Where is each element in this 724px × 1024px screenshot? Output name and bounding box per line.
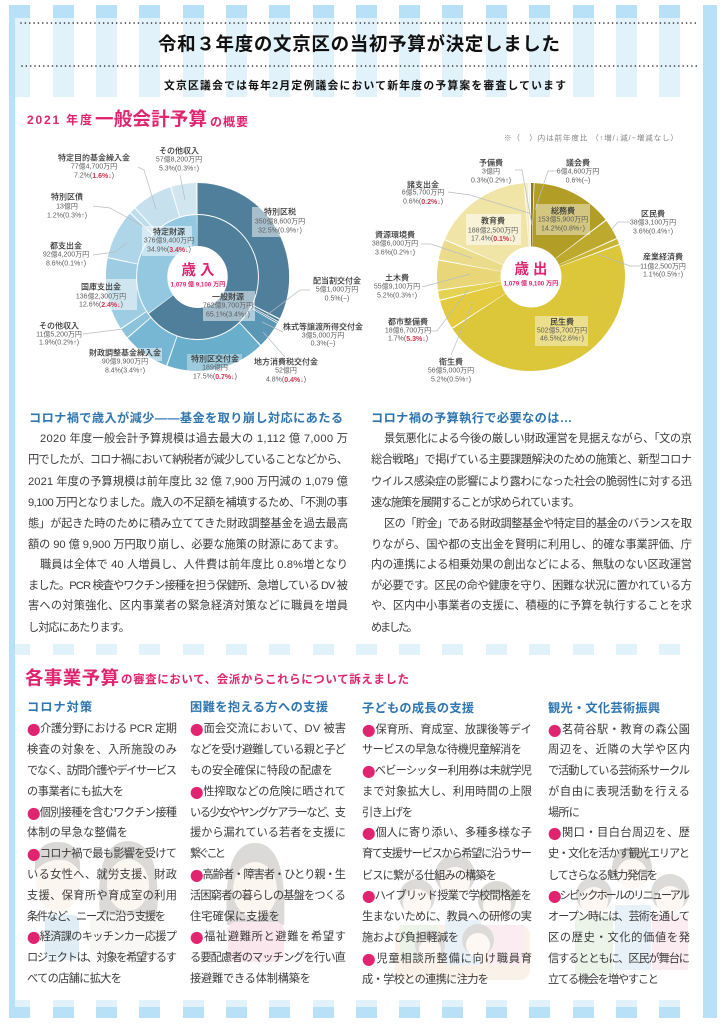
column: covid measures: いる女性へ、就労支援、財政 — [27, 867, 177, 881]
revenue labels: 配当割交付金 — [313, 276, 361, 286]
revenue labels: 都支出金 — [50, 240, 82, 250]
chart: revenue donut — [36, 146, 363, 384]
expenditure labels: 14.2%(0.8%↑) — [541, 226, 585, 232]
column heading: 子どもの成長の支援 — [362, 700, 474, 715]
column: support for people in difficulty: 援から漏れている若者を支援に — [190, 825, 346, 839]
column: tourism and culture: オープン時には、芸術を通して — [548, 909, 690, 923]
expenditure labels: 1.7%(5.3%↓) — [388, 336, 428, 342]
column: covid measures: 体制の早急な整備を — [27, 825, 128, 839]
column heading: 困難を抱える方への支援 — [190, 699, 328, 714]
expenditure labels: 区民費 — [641, 208, 665, 218]
revenue labels: 4.8%(0.4%↓) — [266, 376, 306, 384]
article body: budget execution — [371, 431, 692, 634]
column: tourism and culture: 場所に — [548, 805, 580, 819]
section heading: general account budget: の概要 — [210, 115, 248, 129]
revenue labels: 136億2,300万円 — [76, 292, 126, 300]
revenue labels: 52億円 — [275, 366, 297, 374]
donut rings — [121, 198, 274, 356]
revenue labels: 株式等譲渡所得交付金 — [283, 322, 363, 332]
column: support for people in difficulty: などを受け避難している親と子ど — [190, 742, 346, 756]
centre: revenue total: 歳 入 — [181, 262, 215, 279]
expenditure labels: 56億5,000万円 — [428, 366, 474, 374]
column: tourism and culture: で活動している芸術系サークル — [548, 763, 690, 777]
revenue labels: 350億8,600万円 — [255, 216, 305, 226]
column: covid measures — [27, 699, 177, 985]
expenditure labels: 議会費 — [566, 158, 590, 168]
illustration: girl watermark — [226, 843, 284, 962]
revenue labels: 90億9,900万円 — [102, 356, 148, 366]
revenue labels: 1.9%(0.2%↑) — [39, 340, 79, 346]
expenditure labels: 教育費 — [481, 216, 505, 226]
column: support for people in difficulty: 接避難できる体制構築を — [190, 971, 311, 985]
column: child development: 生まないために、教員への研修の実 — [362, 909, 532, 923]
column: support for people in difficulty: 住宅確保に支援を — [190, 909, 280, 923]
revenue labels: 0.5%(−) — [325, 296, 349, 302]
column: support for people in difficulty: もの安全確保に特段の配慮を — [190, 763, 333, 777]
section heading: committee reviews: の審査において、会派からこれらについて訴えました — [121, 672, 409, 686]
revenue labels: その他収入 — [39, 320, 79, 330]
column: child development: ●保育所、育成室、放課後等デイ — [362, 720, 532, 740]
revenue labels: 1.2%(0.3%↑) — [47, 212, 87, 220]
revenue labels: 一般財源 — [212, 292, 244, 302]
article body: revenue decline: 2020 年度一般会計予算規模は過去最大の 1,112 億 7,000 万 — [40, 431, 348, 445]
expenditure labels: 衛生費 — [439, 356, 463, 366]
label boxes — [466, 204, 590, 346]
article body: revenue decline: ました。PCR 検査やワクチン接種を担う保健所、急増している DV 被 — [28, 578, 348, 592]
expenditure labels: 6億5,700万円 — [402, 188, 444, 196]
column: tourism and culture: 信するとともに、区民が舞台に — [548, 951, 690, 965]
revenue labels: 65.1%(3.4%↑) — [206, 312, 250, 318]
column: covid measures: でなく、訪問介護やデイサービス — [27, 763, 177, 777]
column: child development: ●個人に寄り添い、多種多様な子 — [362, 823, 532, 843]
revenue labels: 8.4%(3.4%↑) — [105, 368, 145, 374]
article body: revenue decline: 態」が起きた時のために積み立ててきた財政調整基金を過去最高 — [28, 516, 348, 530]
centre: expenditure total — [504, 261, 558, 288]
expenditure labels: 民生費 — [550, 316, 574, 326]
column: child development: 育て支援サービスから希望に沿うサー — [362, 846, 532, 860]
expenditure labels: 3.6%(0.2%↑) — [375, 250, 415, 256]
article heading: revenue decline: コロナ禍で歳入が減少――基金を取り崩し対応にあたる — [29, 410, 343, 425]
centre: revenue total — [171, 262, 225, 288]
expenditure labels — [372, 158, 686, 384]
article body: revenue decline — [28, 431, 348, 634]
illustration: singing group watermark — [575, 847, 689, 975]
column: child development: まで対象拡大し、利用時間の上限 — [362, 784, 532, 798]
article body: budget execution: りながら、国や都の支出金を賢明に利用し、的確な事業評価、庁 — [371, 537, 692, 551]
column: child development: ●ハイブリッド授業で学校間格差を — [362, 886, 532, 906]
article body: budget execution: ウイルス感染症の影響により露わになった社会の脆弱性に対する迅 — [371, 474, 692, 488]
column: child development: サービスの早急な待機児童解消を — [362, 742, 522, 756]
revenue labels: 地方消費税交付金 — [254, 356, 318, 366]
illustration: couple watermark — [35, 841, 160, 960]
revenue labels — [36, 146, 363, 384]
column: tourism and culture: 立てる機会を増やすこと — [548, 972, 659, 986]
column: support for people in difficulty: いる少女やヤングケアラーなど、支 — [190, 805, 346, 819]
article body: budget execution: 区の「貯金」である財政調整基金や特定目的基金のバランスを取 — [384, 516, 692, 530]
expenditure labels: 17.4%(0.1%↓) — [471, 236, 515, 242]
column: tourism and culture: ●シビックホールのリニューアル — [548, 886, 690, 906]
revenue labels: 11億5,200万円 — [36, 330, 82, 338]
column: covid measures: 条件など、ニーズに沿う支援を — [27, 909, 166, 923]
centre: expenditure total: 1,079 億 9,100 万円 — [504, 280, 558, 288]
revenue labels: 特定財源 — [153, 226, 185, 236]
revenue labels: 762億9,700万円 — [203, 300, 253, 310]
chart: expenditure donut — [372, 158, 686, 384]
section heading: committee reviews — [25, 668, 409, 688]
revenue labels: 12.6%(2.4%↓) — [79, 302, 123, 308]
column: child development: 引き上げを — [362, 805, 413, 819]
article body: budget execution: 内の連携による相乗効果の創出などによる、無駄のない区政運営 — [371, 557, 692, 571]
revenue labels: 財政調整基金繰入金 — [89, 348, 161, 358]
article body: budget execution: が必要です。区民の命や健康を守り、困難な状況に置かれている方 — [371, 578, 692, 592]
expenditure labels: 5.2%(0.5%↑) — [431, 376, 471, 384]
article body: budget execution: や、区内中小事業者の支援に、積極的に予算を執行することを求 — [371, 598, 692, 612]
column: tourism and culture — [548, 700, 690, 986]
expenditure labels: 0.3%(0.2%↑) — [471, 178, 511, 184]
revenue labels: 376億9,400万円 — [144, 236, 194, 244]
revenue labels: 特別区交付金 — [191, 354, 239, 364]
article body: revenue decline: 額の 90 億 9,900 万円取り崩し、必要な施策の財源にあてます。 — [28, 537, 345, 551]
revenue labels: 17.5%(0.7%↓) — [193, 374, 237, 380]
expenditure labels: 188億2,500万円 — [468, 226, 518, 234]
column: support for people in difficulty: ●高齢者・障害者・ひとり親・生 — [190, 865, 346, 885]
expenditure labels: 18億6,700万円 — [385, 326, 431, 334]
column: support for people in difficulty: 繋ぐこと — [190, 846, 226, 860]
article body: budget execution: めました。 — [371, 621, 418, 634]
column: support for people in difficulty — [190, 699, 346, 985]
column: covid measures: ●経済課のキッチンカー応援プ — [27, 927, 177, 947]
column: covid measures: 検査の対象を、入所施設のみ — [27, 742, 177, 756]
revenue labels: 34.9%(3.4%↓) — [147, 246, 191, 254]
article body: revenue decline: し対応にあたります。 — [28, 621, 130, 634]
expenditure labels: 3.6%(0.4%↑) — [633, 228, 673, 236]
section heading: general account budget: 2021 年度 — [27, 112, 92, 127]
column: support for people in difficulty: る要配慮者のマッチングを行い直 — [190, 950, 346, 964]
section heading: committee reviews: 各事業予算 — [25, 668, 119, 688]
expenditure labels: 資源環境費 — [375, 230, 415, 240]
expenditure labels: 55億9,100万円 — [374, 282, 420, 290]
expenditure labels: 502億5,700万円 — [537, 326, 587, 334]
column: child development: 施および負担軽減を — [362, 930, 459, 944]
revenue labels: 57億8,200万円 — [156, 154, 202, 164]
column: support for people in difficulty: 活困窮者の暮らしの基盤をつくる — [190, 888, 346, 902]
leader lines — [83, 167, 310, 357]
revenue labels: 189億円 — [202, 362, 228, 372]
expenditure labels: 38億3,100万円 — [630, 218, 676, 226]
revenue labels: 特別区税 — [264, 206, 296, 216]
column: covid measures: 支援、保育所や育成室の利用 — [27, 888, 177, 902]
revenue labels: 32.5%(0.9%↑) — [258, 228, 302, 234]
column: child development — [362, 700, 532, 986]
revenue labels: 5.3%(0.3%↑) — [159, 166, 199, 172]
expenditure labels: 153億5,900万円 — [538, 214, 588, 224]
column: tourism and culture: してさらなる魅力発信を — [548, 868, 658, 882]
article body: revenue decline: 9,100 万円となりました。歳入の不足額を補填するため、「不測の事 — [28, 495, 348, 509]
revenue labels: 92億4,200万円 — [43, 250, 89, 258]
expenditure labels: 0.6%(−) — [566, 178, 590, 184]
column: support for people in difficulty: ●性搾取などの危険に晒されて — [190, 782, 346, 802]
column: child development: ビスに繋がる仕組みの構築を — [362, 868, 497, 882]
revenue labels: 3億5,000万円 — [302, 330, 344, 340]
column: child development: 成・学校との連携に注力を — [362, 972, 489, 986]
article heading: budget execution: コロナ禍の予算執行で必要なのは… — [371, 410, 572, 425]
column: covid measures: の事業者にも拡大を — [27, 784, 124, 798]
column: covid measures: べての店舗に拡大を — [27, 971, 122, 985]
expenditure labels: 総務費 — [551, 206, 575, 216]
expenditure labels: 38億6,000万円 — [372, 238, 418, 248]
revenue labels: 5億1,000万円 — [316, 284, 358, 294]
section heading: general account budget: 一般会計予算 — [95, 108, 207, 130]
article body: budget execution: 総合戦略」で掲げている主要課題解決のための施策と、新型コロナ — [371, 452, 692, 466]
section heading: general account budget — [27, 108, 248, 130]
expenditure labels: 諸支出金 — [407, 180, 439, 190]
revenue labels: 0.3%(−) — [311, 340, 335, 348]
centre: revenue total: 1,079 億 9,100 万円 — [171, 280, 225, 288]
column: covid measures: ●コロナ禍で最も影響を受けて — [27, 844, 177, 864]
expenditure labels: 都市整備費 — [388, 316, 428, 326]
column: covid measures: ●個別接種を含むワクチン接種 — [27, 803, 177, 823]
column: covid measures: ロジェクトは、対象を希望するす — [27, 950, 177, 964]
expenditure labels: 5.2%(0.3%↑) — [377, 292, 417, 300]
expenditure labels: 0.6%(0.2%↓) — [403, 198, 443, 206]
expenditure labels: 6億4,600万円 — [557, 166, 599, 176]
revenue labels: その他収入 — [159, 146, 199, 156]
column: tourism and culture: 区の歴史・文化的価値を発 — [548, 930, 690, 944]
column: child development: ●児童相談所整備に向け職員育 — [362, 949, 532, 969]
column: support for people in difficulty: ●面会交流において、DV 被害 — [190, 719, 346, 739]
title: 令和３年度の文京区の当初予算が決定しました — [158, 34, 560, 54]
label boxes — [88, 207, 303, 382]
article body: revenue decline: 害への対策強化、区内事業者の緊急経済対策などに職員を増員 — [28, 598, 348, 612]
expenditure labels: 産業経済費 — [643, 252, 683, 262]
illustration: children group watermark — [395, 855, 530, 980]
article body: budget execution: 速な施策を展開することが求められています。 — [371, 495, 580, 509]
column: tourism and culture: ●茗荷谷駅・教育の森公園 — [548, 720, 690, 740]
article body: revenue decline: 2021 年度の予算規模は前年度比 32 億 7,900 万円減の 1,079 億 — [28, 474, 348, 488]
column heading: 観光・文化芸術振興 — [548, 700, 660, 715]
revenue labels: 特定目的基金繰入金 — [58, 152, 130, 162]
subtitle: 文京区議会では毎年2月定例議会において新年度の予算案を審査しています — [164, 78, 566, 92]
expenditure labels: 3億円 — [482, 166, 500, 176]
revenue labels: 77億4,700万円 — [71, 162, 117, 170]
column heading: コロナ対策 — [27, 699, 92, 714]
revenue labels: 7.2%(1.6%↓) — [74, 172, 114, 180]
article body: revenue decline: 円でしたが、コロナ禍において納税者が減少していることなどから、 — [28, 452, 348, 466]
column: tourism and culture: 史・文化を活かす観光エリアと — [548, 846, 690, 860]
article body: budget execution: 景気悪化による今後の厳しい財政運営を見据えながら、「文の京 — [384, 431, 692, 445]
column: child development: ●ベビーシッター利用券は未就学児 — [362, 761, 532, 781]
expenditure labels: 予備費 — [479, 158, 503, 168]
note: year-on-year legend: ※（ ）内は前年度比 （↑増/↓減/−増減なし） — [504, 132, 678, 142]
article body: revenue decline: 職員は全体で 40 人増員し、人件費は前年度比 0.8%増となり — [40, 557, 348, 571]
leader lines — [421, 170, 641, 355]
column: support for people in difficulty: ●福祉避難所と避難を希望す — [190, 927, 346, 947]
expenditure labels: 11億2,500万円 — [640, 262, 686, 270]
expenditure labels: 46.5%(2.6%↑) — [540, 336, 584, 342]
donut slices — [469, 215, 593, 339]
expenditure labels: 土木費 — [385, 272, 409, 282]
revenue labels: 13億円 — [56, 202, 78, 210]
revenue labels: 8.6%(0.1%↑) — [46, 260, 86, 268]
column: tourism and culture: ●関口・目白台周辺を、歴 — [548, 823, 690, 843]
column: tourism and culture: が自由に表現活動を行える — [548, 784, 690, 798]
expenditure labels: 1.1%(0.5%↑) — [643, 272, 683, 278]
revenue labels: 特別区債 — [51, 192, 83, 202]
column: covid measures: ●介護分野における PCR 定期 — [27, 719, 177, 739]
column: tourism and culture: 周辺を、近隣の大学や区内 — [548, 742, 690, 756]
centre: expenditure total: 歳 出 — [514, 261, 548, 278]
revenue labels: 国庫支出金 — [81, 282, 121, 292]
